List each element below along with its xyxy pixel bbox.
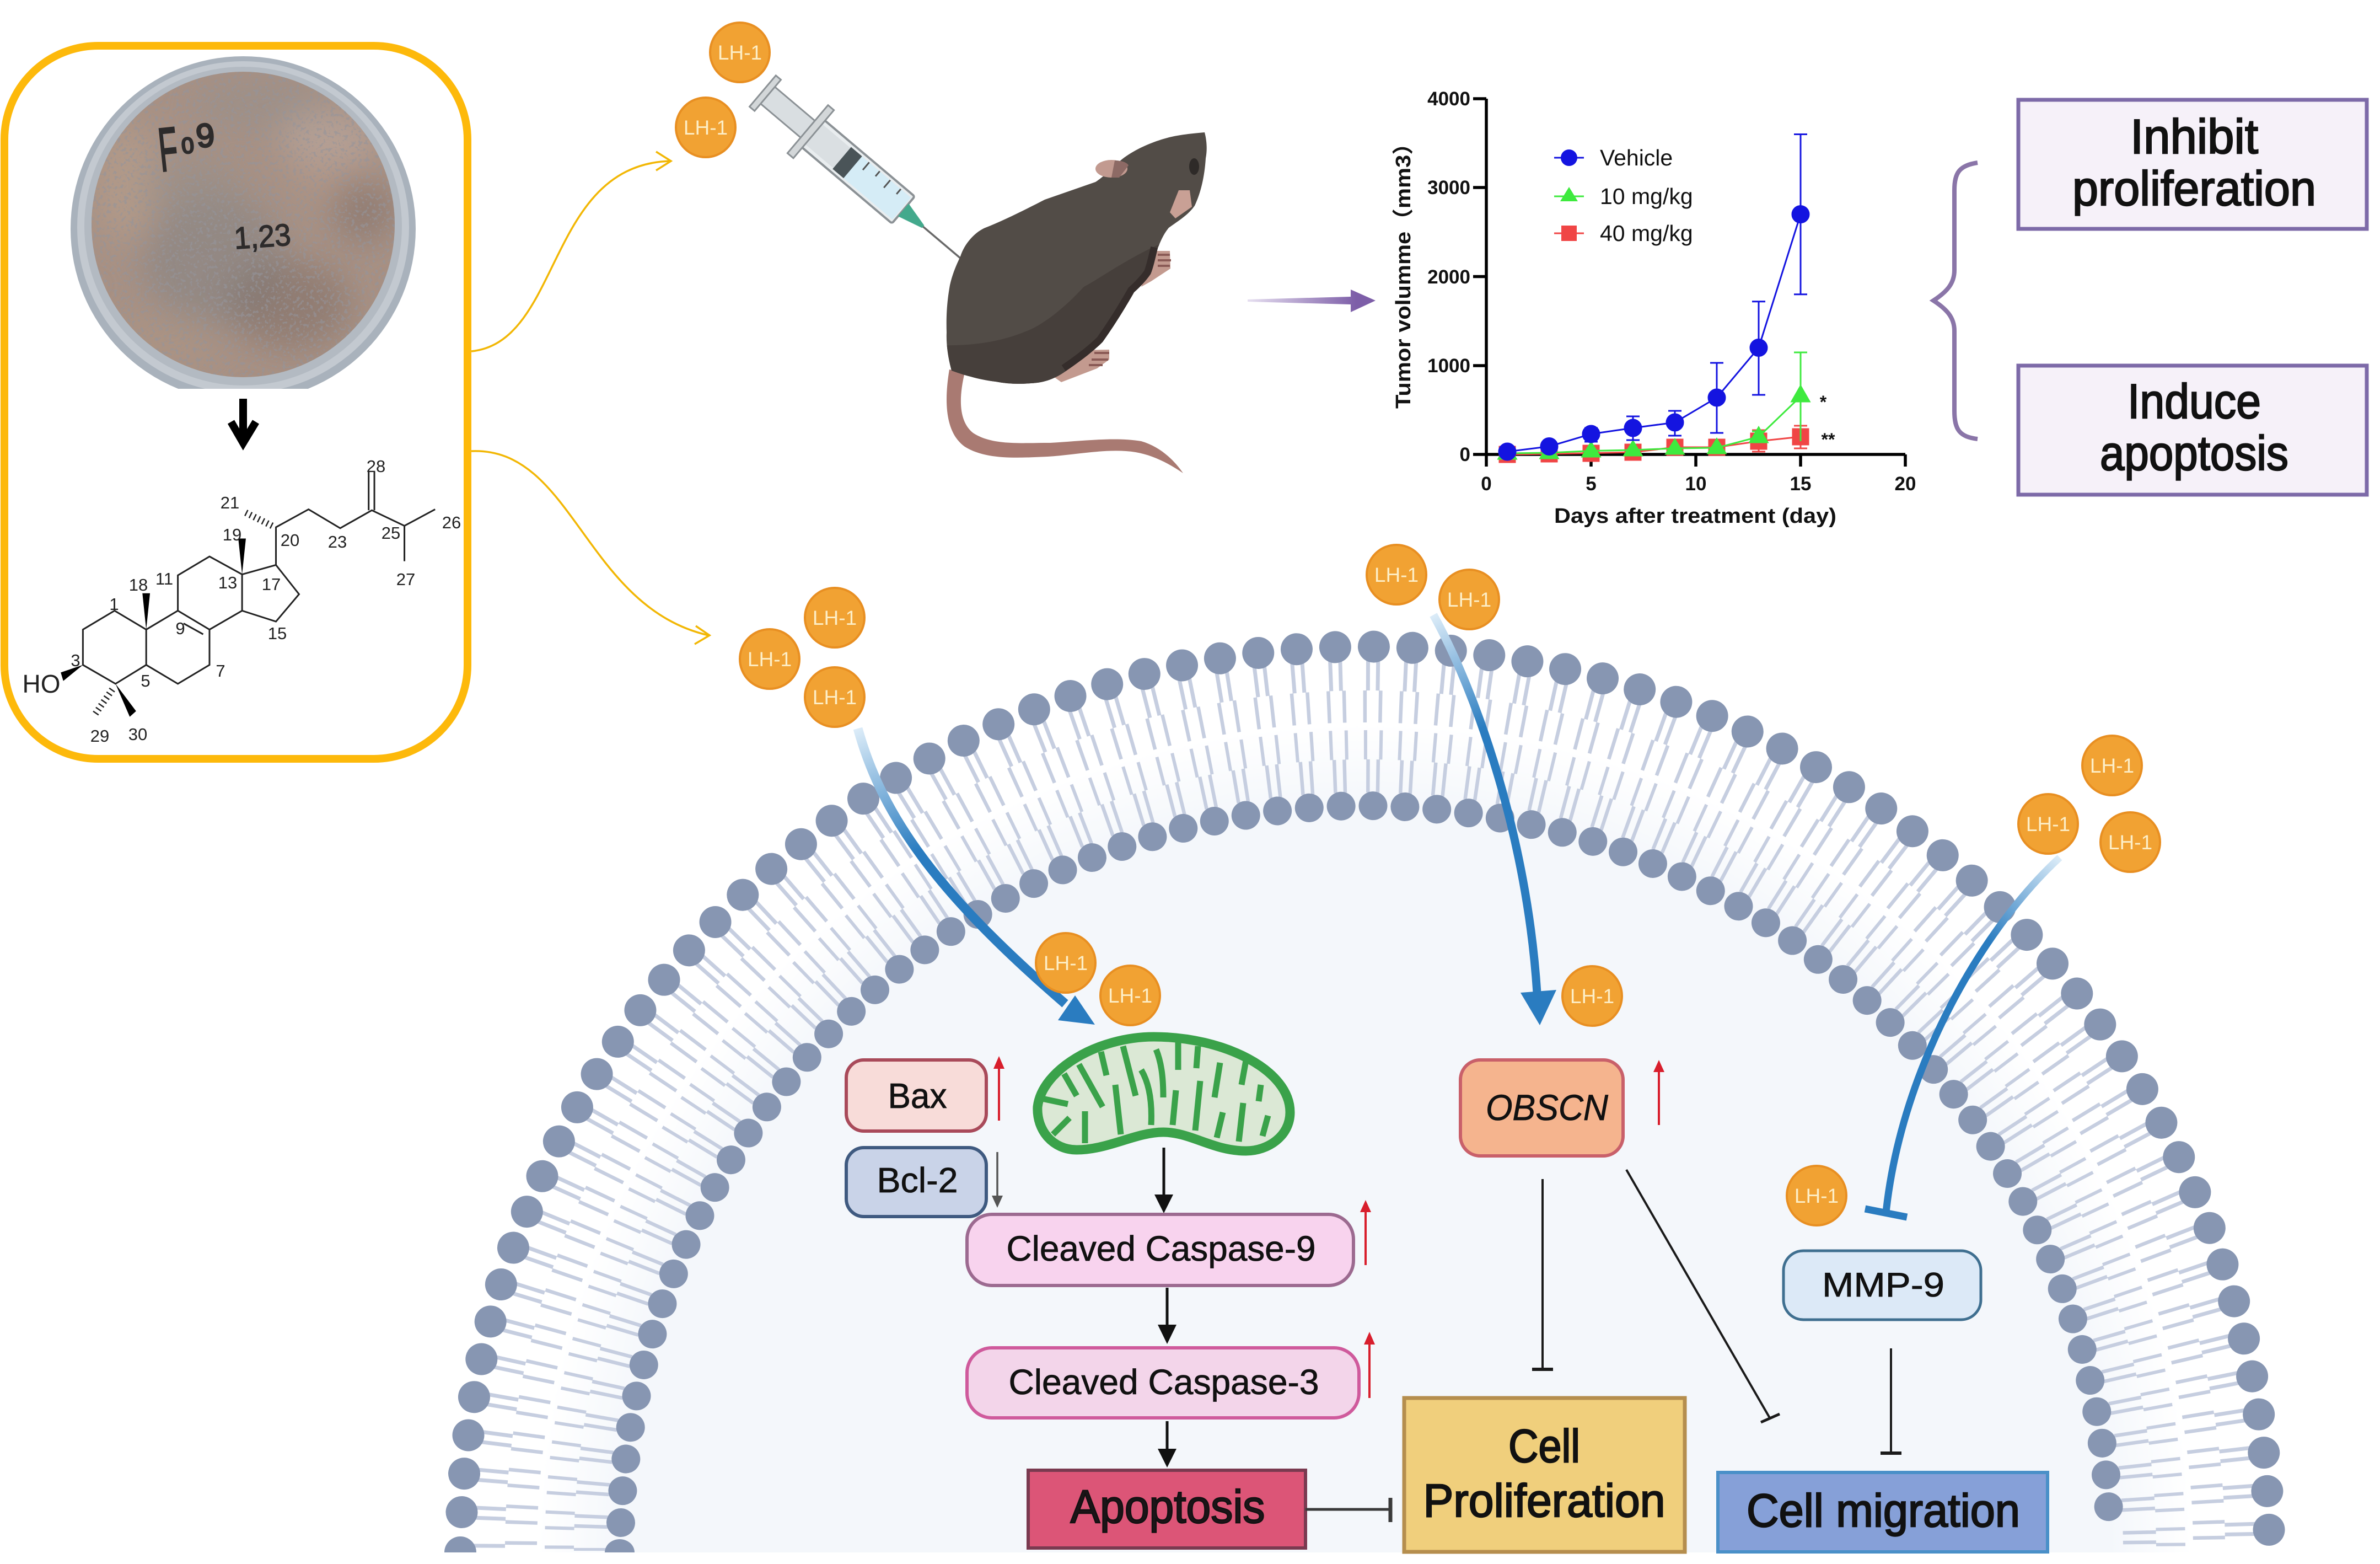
box: Cleaved Caspase-9: [967, 1214, 1353, 1286]
outcome box: induce apoptosis: Induce: [2128, 374, 2261, 429]
chemical structure of LH-1: 19: [223, 525, 241, 544]
LH-1 molecule: [2082, 736, 2142, 795]
chemical structure of LH-1: 27: [396, 570, 415, 589]
arrow: Bax up: [993, 1056, 1004, 1121]
outcome box: induce apoptosis: [2018, 366, 2367, 495]
box: Cleaved Caspase-9: Cleaved Caspase-9: [1007, 1229, 1315, 1268]
LH-1 molecule: [805, 667, 864, 727]
LH-1 molecule: [1787, 1166, 1846, 1225]
cell interior: [538, 725, 2192, 1552]
arrow: mitochondrion to caspase-9: [1154, 1148, 1173, 1213]
inner leaflet heads: [621, 806, 2110, 1534]
LH-1 molecule: LH-1: [1795, 1185, 1839, 1207]
arrow: Bcl-2 down: [992, 1152, 1003, 1208]
box: Bax: [846, 1060, 986, 1131]
handwritten label F09: 0: [180, 133, 195, 159]
mouse front paw: [1141, 251, 1171, 287]
mouse eye: [1189, 158, 1199, 175]
LH-1 molecule: LH-1: [718, 41, 762, 64]
chemical structure of LH-1: 21: [221, 493, 239, 512]
LH-1 molecule: LH-1: [2090, 754, 2134, 777]
x axis tick labels: 5: [1586, 473, 1597, 495]
brace: [1933, 163, 1978, 439]
box: Cell Proliferation: [1404, 1398, 1685, 1552]
box: Bcl-2: Bcl-2: [877, 1160, 958, 1200]
LH-1 molecule: [1036, 933, 1095, 993]
chemical structure of LH-1: 23: [328, 532, 347, 551]
arrow: LH-1 to OBSCN: [1433, 615, 1556, 1025]
inhibition: OBSCN to migration: [1626, 1170, 1780, 1422]
arrow: culture to compound: [231, 399, 256, 443]
mouse body: [947, 132, 1207, 384]
box: Cleaved Caspase-3: Cleaved Caspase-3: [1009, 1362, 1319, 1402]
box: Apoptosis: Apoptosis: [1071, 1481, 1265, 1533]
y axis tick labels: 0: [1460, 444, 1470, 465]
arrow: panel to cell mechanism: [471, 451, 710, 644]
handwritten label F09: 9: [194, 116, 216, 155]
box: Cell Proliferation: Proliferation: [1423, 1475, 1665, 1526]
icon: mitochondrion: [1038, 1037, 1290, 1151]
box: Cell migration: Cell migration: [1747, 1485, 2020, 1536]
cell membrane with lipid bilayer: [444, 647, 2269, 1552]
series: 10 mg/kg: [1498, 352, 1809, 459]
box: MMP-9: [1783, 1251, 1981, 1320]
chemical structure of LH-1: 30: [128, 725, 147, 744]
LH-1 molecule: LH-1: [2108, 831, 2152, 854]
icon: mouse: [937, 132, 1207, 473]
legend: [1554, 145, 1693, 246]
chart: tumor volume line chart: [1392, 88, 1916, 528]
arrow: OBSCN up: [1653, 1060, 1664, 1125]
LH-1 molecule: LH-1: [1108, 984, 1152, 1007]
outer leaflet tails far from heads: [521, 706, 2209, 1551]
box: Cell migration: [1718, 1472, 2048, 1552]
LH-1 molecule: [1439, 570, 1499, 629]
axes: [1473, 99, 1905, 467]
LH-1 molecule: LH-1: [1374, 564, 1419, 586]
LH-1 molecule: [805, 588, 864, 647]
handwritten label F09: F: [155, 114, 181, 185]
chemical structure of LH-1: 20: [281, 531, 299, 550]
panel: fungal source and compound structure: [4, 46, 468, 759]
LH-1 molecule: LH-1: [813, 607, 857, 629]
box: Apoptosis: [1028, 1470, 1305, 1548]
box: MMP-9: MMP-9: [1822, 1266, 1944, 1304]
box: OBSCN: [1460, 1060, 1623, 1156]
box: Bcl-2: [846, 1148, 986, 1217]
box: Cleaved Caspase-3: [967, 1348, 1359, 1418]
significance marks: [1820, 392, 1835, 449]
box: Cell Proliferation: Cell: [1508, 1420, 1580, 1472]
mouse face ear: [1170, 190, 1192, 218]
x axis tick labels: [1481, 473, 1916, 495]
arrow: mouse to chart: [1248, 290, 1376, 312]
chemical structure of LH-1: 17: [262, 575, 281, 594]
LH-1 molecule: [1562, 966, 1622, 1026]
significance marks: *: [1820, 392, 1827, 412]
chemical structure of LH-1: 28: [367, 457, 385, 476]
chemical structure of LH-1: 9: [175, 619, 185, 638]
significance marks: **: [1822, 430, 1835, 449]
y axis tick labels: [1427, 88, 1470, 465]
mouse back ear: [1095, 160, 1129, 178]
LH-1 molecule: LH-1: [2026, 813, 2070, 835]
inner leaflet tails far from heads: [559, 745, 2171, 1551]
y axis tick labels: 4000: [1427, 88, 1470, 110]
chemical structure of LH-1: 15: [268, 624, 287, 643]
chemical structure of LH-1: 11: [155, 569, 173, 588]
series: vehicle: [1499, 135, 1809, 460]
LH-1 molecule: [1367, 545, 1426, 604]
y axis tick labels: 2000: [1427, 266, 1470, 288]
LH-1 molecule: LH-1: [1044, 952, 1088, 974]
arrow: caspase-3 to apoptosis: [1158, 1421, 1176, 1467]
chemical structure of LH-1: 1: [109, 594, 119, 614]
arrow: caspase-9 to caspase-3: [1158, 1288, 1176, 1344]
box: OBSCN: OBSCN: [1486, 1087, 1608, 1128]
outcome box: inhibit proliferation: Inhibit: [2130, 109, 2258, 164]
handwritten label 1,23: 1,23: [233, 217, 292, 256]
chemical structure of LH-1: 3: [71, 651, 80, 670]
chemical structure of LH-1: 5: [141, 671, 151, 690]
chemical structure of LH-1: 7: [216, 661, 225, 681]
outer leaflet tails near heads: [488, 674, 2242, 1551]
legend: 40 mg/kg: [1600, 221, 1693, 246]
cut-off inner head at lower left: [605, 1539, 635, 1552]
outcome box: induce apoptosis: apoptosis: [2100, 426, 2288, 480]
arrow: LH-1 into mitochondrion: [858, 729, 1095, 1025]
chemical structure of LH-1: 29: [90, 726, 109, 746]
LH-1 molecule: LH-1: [748, 648, 792, 671]
handwritten label F09: [159, 122, 214, 172]
x axis tick labels: 15: [1790, 473, 1811, 495]
chemical structure of LH-1: 26: [442, 513, 461, 532]
box: Bax: Bax: [888, 1076, 947, 1116]
LH-1 molecule: [710, 23, 770, 82]
outcome box: inhibit proliferation: proliferation: [2072, 161, 2316, 216]
arrow: caspase-9 up: [1360, 1200, 1371, 1265]
chemical structure of LH-1: 13: [218, 573, 237, 592]
inhibition: OBSCN to proliferation: [1532, 1179, 1553, 1369]
y axis title: Tumor volumme（mm3）: [1392, 132, 1415, 409]
LH-1 molecule: [2018, 794, 2078, 854]
inhibition: MMP-9 to migration: [1881, 1348, 1901, 1453]
chemical structure of LH-1: HO: [22, 669, 61, 698]
chemical structure of LH-1: [22, 457, 461, 746]
cut-off outer head at lower left: [444, 1536, 476, 1552]
outcome box: inhibit proliferation: [2018, 100, 2367, 229]
legend: 10 mg/kg: [1600, 184, 1693, 209]
x axis tick labels: 10: [1685, 473, 1706, 495]
x axis title: Days after treatment (day): [1554, 505, 1836, 528]
LH-1 molecule: [740, 629, 799, 689]
x axis tick labels: 20: [1895, 473, 1916, 495]
mouse tail: [947, 369, 1183, 473]
outer leaflet heads: [462, 647, 2269, 1534]
image: petri dish with fungal culture: [71, 56, 416, 401]
series: 40 mg/kg: [1500, 426, 1808, 462]
icon: syringe: [743, 67, 980, 282]
y axis tick labels: 1000: [1427, 355, 1470, 377]
LH-1 molecule: [1100, 966, 1160, 1025]
y axis tick labels: 3000: [1427, 177, 1470, 199]
mouse lower shading: [947, 244, 1159, 384]
chemical structure of LH-1: 18: [129, 575, 148, 594]
LH-1 molecule: LH-1: [813, 686, 857, 709]
inner leaflet tails near heads: [590, 776, 2140, 1551]
inhibition: apoptosis to proliferation: [1305, 1498, 1390, 1522]
mouse hind foot: [1051, 350, 1109, 382]
arrow: caspase-3 up: [1364, 1332, 1375, 1398]
x axis tick labels: 0: [1481, 473, 1492, 495]
legend: Vehicle: [1600, 145, 1673, 170]
inhibition: LH-1 to MMP-9: [1865, 858, 2060, 1217]
LH-1 molecule: [676, 98, 735, 157]
LH-1 molecule: LH-1: [1570, 985, 1614, 1008]
chemical structure of LH-1: 25: [382, 523, 400, 543]
LH-1 molecule: [2100, 812, 2160, 872]
LH-1 molecule: LH-1: [1447, 588, 1491, 611]
LH-1 molecule: LH-1: [684, 116, 728, 139]
arrow: panel to mouse experiment: [471, 152, 671, 351]
